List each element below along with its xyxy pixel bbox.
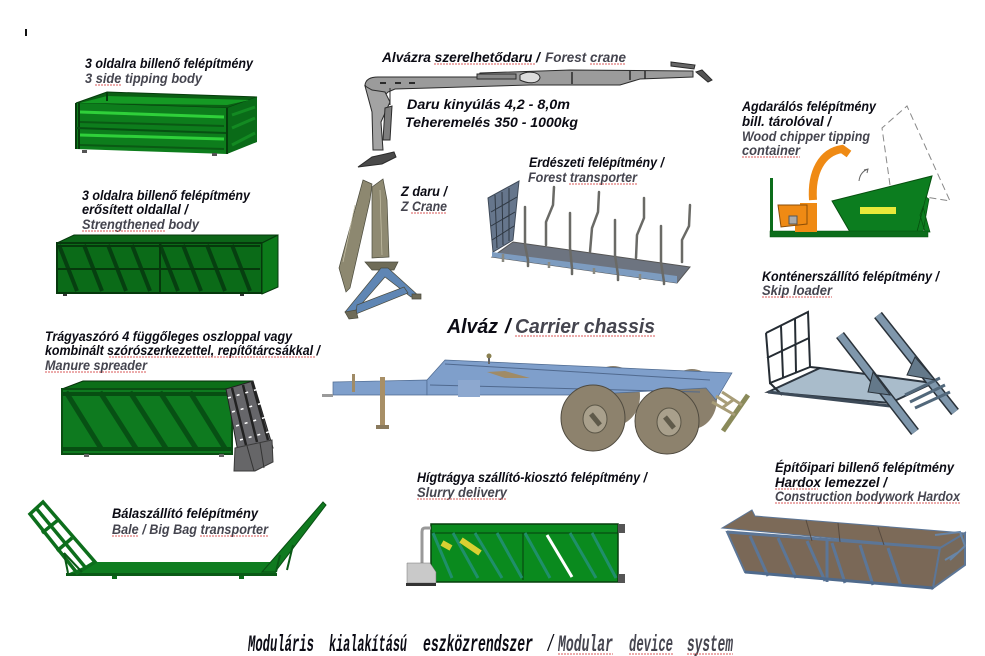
panel: bale transporter <box>30 502 326 579</box>
heading: forest transporter: Forest transporter <box>528 169 638 185</box>
heading: skip loader <box>762 268 941 298</box>
heading: strengthened body: 3 oldalra billenő felépítmény <box>82 187 251 203</box>
specification text: Teheremelés 350 - 1000kg <box>405 114 578 130</box>
panel: manure spreader <box>45 328 322 471</box>
heading: strengthened body: Strengthened body <box>82 216 200 232</box>
panel: forest transporter <box>488 154 690 284</box>
heading: manure spreader: kombinált szórószerkezettel, repítőtárcsákkal / <box>45 342 322 358</box>
heading: wood chipper: bill. tárolóval / <box>742 113 833 129</box>
heading: slurry delivery <box>417 469 649 500</box>
heading: forest crane: Forest crane <box>545 49 626 65</box>
panel: strengthened body <box>57 187 278 296</box>
panel: Z crane <box>339 179 449 319</box>
heading: skip loader: Konténerszállító felépítmény / <box>762 268 941 284</box>
bale transporter drawing <box>30 502 326 579</box>
heading: construction bodywork <box>775 459 961 504</box>
heading: wood chipper: Wood chipper tipping <box>742 128 870 144</box>
heading: forest crane: Alvázra szerelhetődaru / <box>381 49 542 65</box>
panel: chassis <box>322 316 748 454</box>
heading: construction bodywork: Építőipari billenő felépítmény <box>775 459 955 475</box>
specification text <box>405 96 578 130</box>
heading: 3 side tipping body: 3 side tipping body <box>85 70 203 86</box>
chassis drawing <box>322 354 748 454</box>
heading: wood chipper <box>741 98 877 158</box>
panel: slurry delivery <box>406 469 649 586</box>
heading: slurry delivery: Hígtrágya szállító-kiosztó felépítmény / <box>417 469 649 485</box>
heading: manure spreader: Trágyaszóró 4 függőleges oszloppal vagy <box>45 328 293 344</box>
heading: forest transporter <box>528 154 666 185</box>
icon: green tipping body <box>76 92 257 156</box>
footer title <box>247 632 733 656</box>
wood chipper drawing <box>770 106 950 237</box>
heading: strengthened body <box>82 187 251 232</box>
heading: bale transporter: Bálaszállító felépítmény <box>112 505 259 521</box>
corner mark <box>25 29 27 36</box>
skip loader drawing <box>766 312 955 432</box>
panel: skip loader <box>762 268 955 432</box>
manure spreader drawing <box>62 381 273 471</box>
construction body drawing <box>722 510 965 588</box>
heading: carrier chassis: / <box>504 316 513 338</box>
heading: carrier chassis: Carrier chassis <box>515 316 655 338</box>
heading: wood chipper: container <box>742 142 801 158</box>
heading: forest transporter: Erdészeti felépítmény / <box>529 154 666 170</box>
heading: construction bodywork: Hardox lemezzel / <box>775 474 889 490</box>
heading: strengthened body: erősített oldallal / <box>82 201 190 217</box>
forest transporter drawing <box>488 181 690 284</box>
specification text: Daru kinyúlás 4,2 - 8,0m <box>407 96 570 112</box>
heading: Z crane: Z daru / <box>400 183 449 199</box>
panel: forest crane <box>358 49 712 167</box>
heading: construction bodywork: Construction bodywork Hardox <box>775 488 961 504</box>
heading: carrier chassis <box>446 316 655 338</box>
icon: strengthened green body <box>57 235 278 296</box>
crane drawing <box>358 62 712 167</box>
heading: skip loader: Skip loader <box>762 282 833 298</box>
panel: 3 side tipping body <box>76 55 257 156</box>
heading: wood chipper: Agdarálós felépítmény <box>741 98 877 114</box>
heading: bale transporter: Bale / Big Bag transporter <box>112 521 269 537</box>
heading: 3 side tipping body <box>85 55 254 86</box>
heading: forest crane <box>381 49 626 65</box>
heading: manure spreader: Manure spreader <box>45 357 148 373</box>
Z crane drawing <box>339 179 421 319</box>
panel: wood chipper <box>741 98 950 237</box>
heading: bale transporter <box>112 505 269 537</box>
heading: slurry delivery: Slurry delivery <box>417 484 508 500</box>
heading: carrier chassis: Alváz <box>446 316 498 338</box>
heading: manure spreader <box>45 328 322 373</box>
slurry drawing <box>406 524 625 586</box>
heading: Z crane: Z Crane <box>400 198 447 214</box>
heading: 3 side tipping body: 3 oldalra billenő felépítmény <box>85 55 254 71</box>
heading: Z crane <box>400 183 449 214</box>
panel: construction bodywork <box>722 459 965 588</box>
